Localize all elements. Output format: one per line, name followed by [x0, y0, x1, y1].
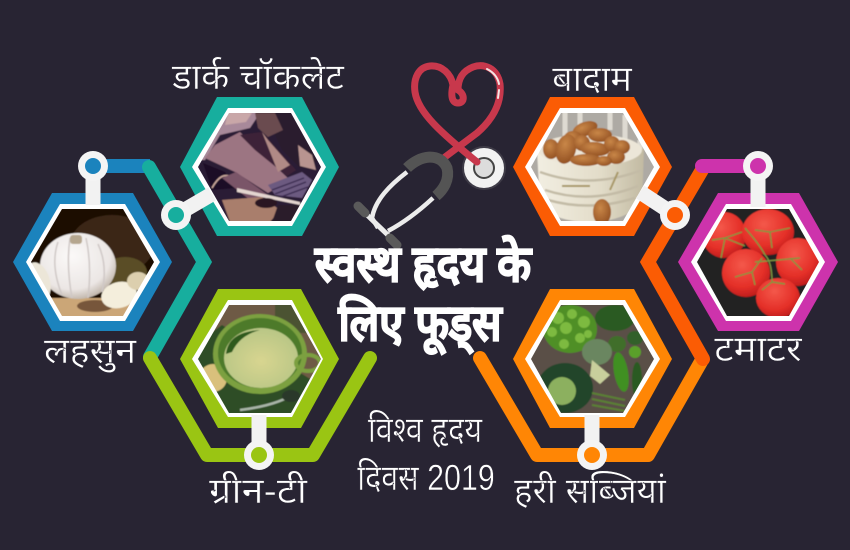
connector: magenta line [702, 159, 758, 173]
panel: tomatoes [678, 151, 838, 331]
connector: orange node [640, 192, 690, 230]
photo: garlic [31, 209, 154, 316]
connector: green line [150, 358, 370, 455]
label: green vegetables: हरी सब्जियां [514, 471, 667, 511]
tube highlight [487, 69, 499, 98]
connector: deep orange line [648, 170, 703, 359]
ear tips [358, 206, 397, 245]
panel: almonds [513, 97, 690, 236]
grey tube [407, 157, 448, 196]
connector: veg node [577, 415, 607, 470]
label: green tea: ग्रीन-टी [209, 471, 308, 512]
subtitle: world heart day 2019: विश्व हृदय [368, 410, 483, 451]
subtitle: world heart day 2019 [357, 410, 495, 499]
photo: almonds [531, 113, 654, 221]
label: dark chocolate: डार्क चॉकलेट [171, 56, 345, 97]
panel: green vegetables [513, 289, 672, 470]
chest piece [463, 147, 505, 189]
connector: blue line [93, 159, 150, 173]
title: लिए फूड्स [338, 294, 504, 355]
icon: heart stethoscope [358, 66, 505, 245]
connector: light orange line [480, 358, 702, 455]
label: tomatoes: टमाटर [714, 328, 803, 369]
hexagon frame [180, 97, 339, 236]
panel: dark chocolate [161, 97, 339, 236]
hexagon frame [513, 97, 672, 236]
subtitle: world heart day 2019: दिवस 2019 [357, 458, 495, 499]
heart tube [415, 66, 500, 162]
hexagon frame [13, 193, 172, 331]
connector: teal node [161, 194, 212, 230]
label: almonds: बादाम [552, 58, 633, 99]
title [314, 235, 533, 355]
title: स्वस्थ हृदय के [314, 235, 533, 292]
hexagon frame [513, 289, 672, 428]
hexagon frame [678, 193, 838, 331]
white ear tubes [372, 172, 433, 231]
headset bar [365, 213, 391, 238]
photo: tomatoes [697, 209, 819, 316]
connector: magenta node [743, 151, 773, 207]
hexagon frame [180, 289, 339, 428]
connector: blue node [78, 151, 108, 205]
photo: vegetables [531, 305, 654, 413]
label: garlic: लहसुन [44, 331, 137, 373]
panel: garlic [13, 193, 172, 331]
connector: green node [244, 415, 274, 470]
photo: green tea [198, 305, 321, 413]
connector: teal line [149, 167, 204, 357]
panel: green tea [180, 289, 339, 470]
photo: chocolate [198, 113, 321, 221]
